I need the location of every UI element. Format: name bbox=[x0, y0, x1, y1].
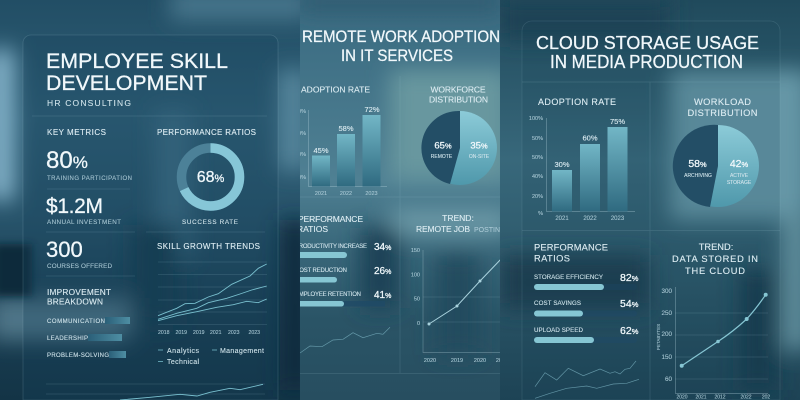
bottom sparkline bbox=[46, 384, 265, 400]
background: blurred office, right section bbox=[500, 0, 800, 400]
pie label: on-site bbox=[469, 140, 490, 160]
workload distribution pie bbox=[673, 97, 759, 207]
panel: employee skill development bbox=[23, 35, 278, 400]
donut chart bbox=[182, 148, 240, 206]
y axis ticks: 0 bbox=[417, 321, 420, 327]
metric: employee retention: 41% bbox=[374, 290, 391, 301]
metric: productivity increase bbox=[290, 242, 391, 258]
bar 2023: 72% bbox=[364, 105, 380, 114]
metric: courses offered bbox=[46, 241, 112, 268]
metric: cost reduction bbox=[290, 266, 391, 282]
background: blurred office, left section bbox=[0, 0, 310, 400]
bar 2021 bbox=[552, 160, 572, 222]
metric: cost savings: 54% bbox=[620, 298, 639, 310]
x axis labels: 2021 bbox=[496, 358, 508, 364]
title bbox=[536, 33, 759, 72]
metric: annual investment: $1.2M bbox=[46, 195, 103, 218]
heading: ADOPTION RATE bbox=[538, 97, 616, 107]
metric: upload speed: 62% bbox=[620, 325, 639, 337]
adoption rate bar chart bbox=[529, 97, 635, 222]
trend line bbox=[680, 293, 768, 368]
heading: ADOPTION RATE bbox=[301, 84, 370, 94]
donut label: SUCCESS RATE bbox=[182, 219, 238, 226]
performance ratios bbox=[534, 242, 639, 398]
y axis ticks: 60 bbox=[665, 376, 672, 383]
y axis ticks: 100% bbox=[529, 116, 543, 122]
heading: TREND: bbox=[442, 213, 474, 223]
performance ratios bbox=[290, 214, 391, 353]
metric: storage efficiency bbox=[534, 272, 639, 290]
heading: POSTINGS bbox=[474, 227, 511, 234]
heading: THE CLOUD bbox=[685, 266, 745, 276]
bar 2022: 60% bbox=[582, 134, 598, 142]
metric: productivity increase: PRODUCTIVITY INCREASE bbox=[295, 244, 367, 250]
pie label: active storage bbox=[727, 158, 752, 186]
heading: DATA STORED IN bbox=[672, 254, 758, 264]
heading bbox=[688, 97, 758, 118]
heading bbox=[430, 86, 488, 102]
heading: PERFORMANCE RATIOS bbox=[157, 128, 256, 137]
axes bbox=[676, 287, 768, 394]
pie label: on-site: 35% bbox=[470, 140, 488, 152]
y axis ticks: 250 bbox=[661, 310, 672, 317]
y axis ticks: 300 bbox=[661, 288, 672, 295]
heading: RATIOS bbox=[534, 254, 570, 264]
metric: courses offered: 300 bbox=[46, 237, 83, 262]
bar 2022: 2022 bbox=[340, 191, 352, 197]
skill growth trends chart bbox=[157, 242, 267, 366]
adoption rate bar chart bbox=[295, 84, 387, 197]
sparklines bbox=[535, 361, 639, 398]
heading: DISTRIBUTION bbox=[429, 94, 488, 104]
x axis labels: 2023 bbox=[248, 330, 260, 336]
heading: WORKLOAD bbox=[694, 97, 751, 107]
bar 2023: 2023 bbox=[611, 216, 625, 222]
bar 2023: 2023 bbox=[365, 191, 378, 197]
heading: PERFORMANCE bbox=[534, 242, 608, 252]
metric: cost savings: COST SAVINGS bbox=[534, 300, 581, 307]
heading: WORKFORCE bbox=[430, 84, 486, 94]
pie chart bbox=[673, 125, 759, 207]
x axis labels: 2023 bbox=[228, 330, 240, 336]
metric: employee retention: EMPLOYEE RETENTION bbox=[295, 292, 361, 298]
x axis labels bbox=[676, 394, 770, 400]
title: EMPLOYEE SKILL bbox=[46, 50, 228, 73]
bar 2022: 58% bbox=[338, 124, 354, 133]
x axis labels: 2019 bbox=[451, 358, 463, 364]
heading bbox=[416, 213, 511, 234]
metric: upload speed bbox=[534, 325, 639, 343]
pie label: active storage: ACTIVE bbox=[730, 173, 749, 179]
bar 2023 bbox=[608, 117, 628, 222]
pie chart bbox=[421, 111, 497, 185]
x axis labels bbox=[424, 358, 508, 364]
title: IN IT SERVICES bbox=[341, 46, 453, 65]
x axis labels: 2020 bbox=[474, 358, 486, 364]
metric: productivity increase: 34% bbox=[374, 242, 391, 253]
axes bbox=[308, 110, 387, 186]
metric: training participation: TRAINING PARTICIPATION bbox=[47, 176, 132, 182]
metric: training participation: 80% bbox=[46, 147, 88, 174]
heading: BREAKDOWN bbox=[47, 296, 103, 306]
pie label: remote: 65% bbox=[434, 140, 452, 152]
heading: REMOTE JOB bbox=[416, 224, 470, 234]
metric: storage efficiency: STORAGE EFFICIENCY bbox=[534, 274, 603, 281]
heading: IMPROVEMENT bbox=[47, 287, 111, 297]
pie label: active storage: 42% bbox=[730, 158, 749, 170]
metric: upload speed: UPLOAD SPEED bbox=[534, 327, 584, 334]
y axis ticks: 150 bbox=[411, 248, 420, 254]
legend: Management bbox=[220, 348, 264, 355]
title: CLOUD STORAGE USAGE bbox=[536, 33, 759, 53]
heading: PERFORMANCE bbox=[298, 214, 363, 224]
legend bbox=[158, 348, 264, 366]
pie label: active storage: STORAGE bbox=[727, 180, 752, 186]
y axis ticks: 20% bbox=[532, 194, 543, 200]
improvement breakdown bbox=[47, 287, 130, 359]
bar: communication: COMMUNICATION bbox=[47, 319, 105, 325]
y axis ticks: 40% bbox=[532, 174, 543, 180]
y axis ticks bbox=[529, 116, 543, 217]
title bbox=[303, 30, 499, 62]
heading: DISTRIBUTION bbox=[688, 108, 758, 118]
title: DEVELOPMENT bbox=[46, 72, 207, 95]
performance ratios donut bbox=[157, 128, 256, 226]
trend line bbox=[428, 258, 502, 326]
bar 2023: 75% bbox=[610, 117, 625, 126]
subtitle: HR CONSULTING bbox=[47, 98, 131, 108]
key metrics bbox=[46, 128, 132, 270]
y axis ticks bbox=[300, 109, 306, 179]
metric: cost reduction: 26% bbox=[374, 266, 391, 277]
legend: Analytics bbox=[167, 348, 200, 355]
bar 2022 bbox=[580, 134, 600, 222]
bar 2021 bbox=[312, 146, 330, 197]
heading bbox=[672, 242, 758, 276]
panel: remote work adoption bbox=[290, 27, 511, 374]
metric: training participation bbox=[46, 151, 132, 180]
bar 2021: 2021 bbox=[315, 191, 327, 197]
metric: courses offered: COURSES OFFERED bbox=[47, 263, 112, 270]
y axis ticks: 50% bbox=[532, 136, 543, 142]
y axis ticks: 100 bbox=[411, 272, 420, 278]
donut value: 68% bbox=[197, 169, 225, 186]
x axis labels: 2018 bbox=[158, 330, 170, 336]
bar: problem-solving: PROBLEM-SOLVING bbox=[47, 353, 109, 359]
line: technical bbox=[158, 299, 267, 321]
pie label: archiving: ARCHIVING bbox=[684, 173, 712, 179]
title bbox=[48, 53, 228, 90]
pie label: remote bbox=[431, 140, 453, 160]
x axis labels bbox=[158, 330, 260, 334]
bar 2022 bbox=[337, 124, 355, 197]
pie label: archiving: 58% bbox=[688, 158, 707, 170]
y axis title: PETABYTES bbox=[656, 324, 661, 350]
y axis ticks: 20% bbox=[295, 175, 306, 181]
y axis ticks bbox=[411, 248, 420, 327]
y axis ticks: % bbox=[538, 211, 543, 217]
y axis ticks: 50% bbox=[532, 155, 543, 161]
trend: data stored in the cloud bbox=[656, 242, 770, 400]
background: blurred office, middle section bbox=[300, 0, 510, 400]
x axis labels: 2019 bbox=[176, 330, 187, 336]
trend: remote job postings bbox=[411, 213, 511, 364]
y axis ticks: 150 bbox=[661, 354, 672, 361]
y axis ticks: 80% bbox=[295, 109, 306, 115]
title: REMOTE WORK ADOPTION bbox=[302, 27, 500, 46]
metric: annual investment: ANNUAL INVESTMENT bbox=[47, 219, 121, 226]
pie label: remote: REMOTE bbox=[431, 154, 453, 160]
bar: leadership: LEADERSHIP bbox=[47, 336, 88, 342]
bar 2023 bbox=[362, 105, 380, 197]
heading: KEY METRICS bbox=[47, 128, 106, 137]
heading bbox=[534, 242, 608, 264]
sparkline bbox=[300, 327, 390, 353]
bar 2021: 2021 bbox=[555, 216, 569, 222]
bar 2021: 30% bbox=[554, 160, 570, 169]
y axis ticks bbox=[661, 288, 672, 383]
metric: cost reduction: COST REDUCTION bbox=[295, 268, 347, 274]
y axis ticks: 200 bbox=[661, 331, 672, 338]
x axis labels: 2019 bbox=[193, 330, 205, 336]
legend: Technical bbox=[167, 359, 199, 366]
panel: cloud storage usage bbox=[522, 21, 780, 400]
line: management bbox=[158, 286, 267, 319]
y axis ticks: 50 bbox=[414, 296, 420, 302]
pie label: on-site: ON-SITE bbox=[469, 154, 490, 160]
heading bbox=[48, 289, 111, 304]
heading: RATIOS bbox=[297, 224, 328, 234]
title: IN MEDIA PRODUCTION bbox=[550, 52, 743, 72]
bar 2021: 45% bbox=[313, 146, 329, 155]
heading bbox=[297, 214, 363, 234]
y axis ticks: 40% bbox=[295, 152, 306, 158]
metric: employee retention bbox=[290, 290, 391, 306]
y axis ticks: 60% bbox=[295, 131, 306, 137]
axes bbox=[423, 250, 500, 352]
axes bbox=[546, 118, 635, 212]
metric: annual investment bbox=[46, 196, 121, 224]
metric: storage efficiency: 82% bbox=[620, 272, 639, 284]
metric: cost savings bbox=[534, 298, 639, 316]
heading: SKILL GROWTH TRENDS bbox=[157, 242, 260, 251]
workforce distribution pie bbox=[421, 84, 497, 185]
heading: TREND: bbox=[699, 242, 733, 252]
pie label: archiving bbox=[684, 158, 712, 179]
x axis labels: 2021 bbox=[210, 330, 222, 336]
line: analytics bbox=[158, 264, 267, 316]
x axis labels: 2020 bbox=[424, 358, 436, 364]
bar 2022: 2022 bbox=[583, 216, 597, 222]
